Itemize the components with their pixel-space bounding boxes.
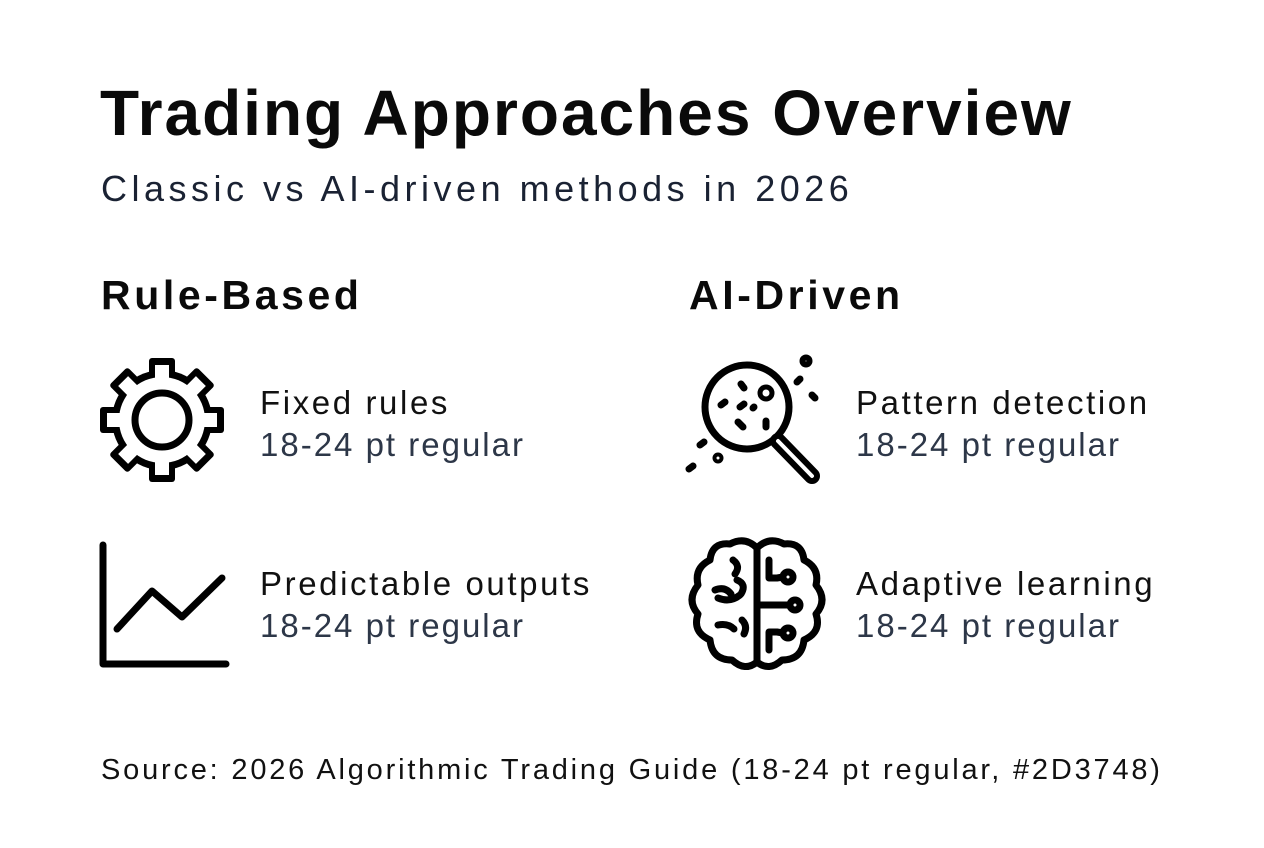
heading: rule-based: Rule-Based [101, 272, 363, 318]
subtitle: Classic vs AI-driven methods in 2026 [101, 168, 853, 209]
item: fixed rules: 18-24 pt regular [260, 426, 525, 463]
item: adaptive learning [856, 565, 1155, 644]
item: fixed rules [260, 384, 525, 463]
item: predictable outputs: Predictable outputs [260, 565, 592, 602]
item: predictable outputs [260, 565, 592, 644]
item: pattern detection: Pattern detection [856, 384, 1150, 421]
source: Source: 2026 Algorithmic Trading Guide (18-24 pt regular, #2D3748) [101, 754, 1163, 786]
heading: ai-driven: AI-Driven [689, 272, 904, 318]
item: pattern detection [856, 384, 1150, 463]
item: predictable outputs: 18-24 pt regular [260, 607, 525, 644]
icon: line chart [103, 545, 226, 664]
item: fixed rules: Fixed rules [260, 384, 450, 421]
item: adaptive learning: 18-24 pt regular [856, 607, 1121, 644]
icon: gear [100, 358, 224, 482]
icon: magnifier [689, 358, 815, 476]
icon: brain [692, 541, 822, 667]
item: adaptive learning: Adaptive learning [856, 565, 1155, 602]
title: Trading Approaches Overview [100, 77, 1073, 149]
item: pattern detection: 18-24 pt regular [856, 426, 1121, 463]
